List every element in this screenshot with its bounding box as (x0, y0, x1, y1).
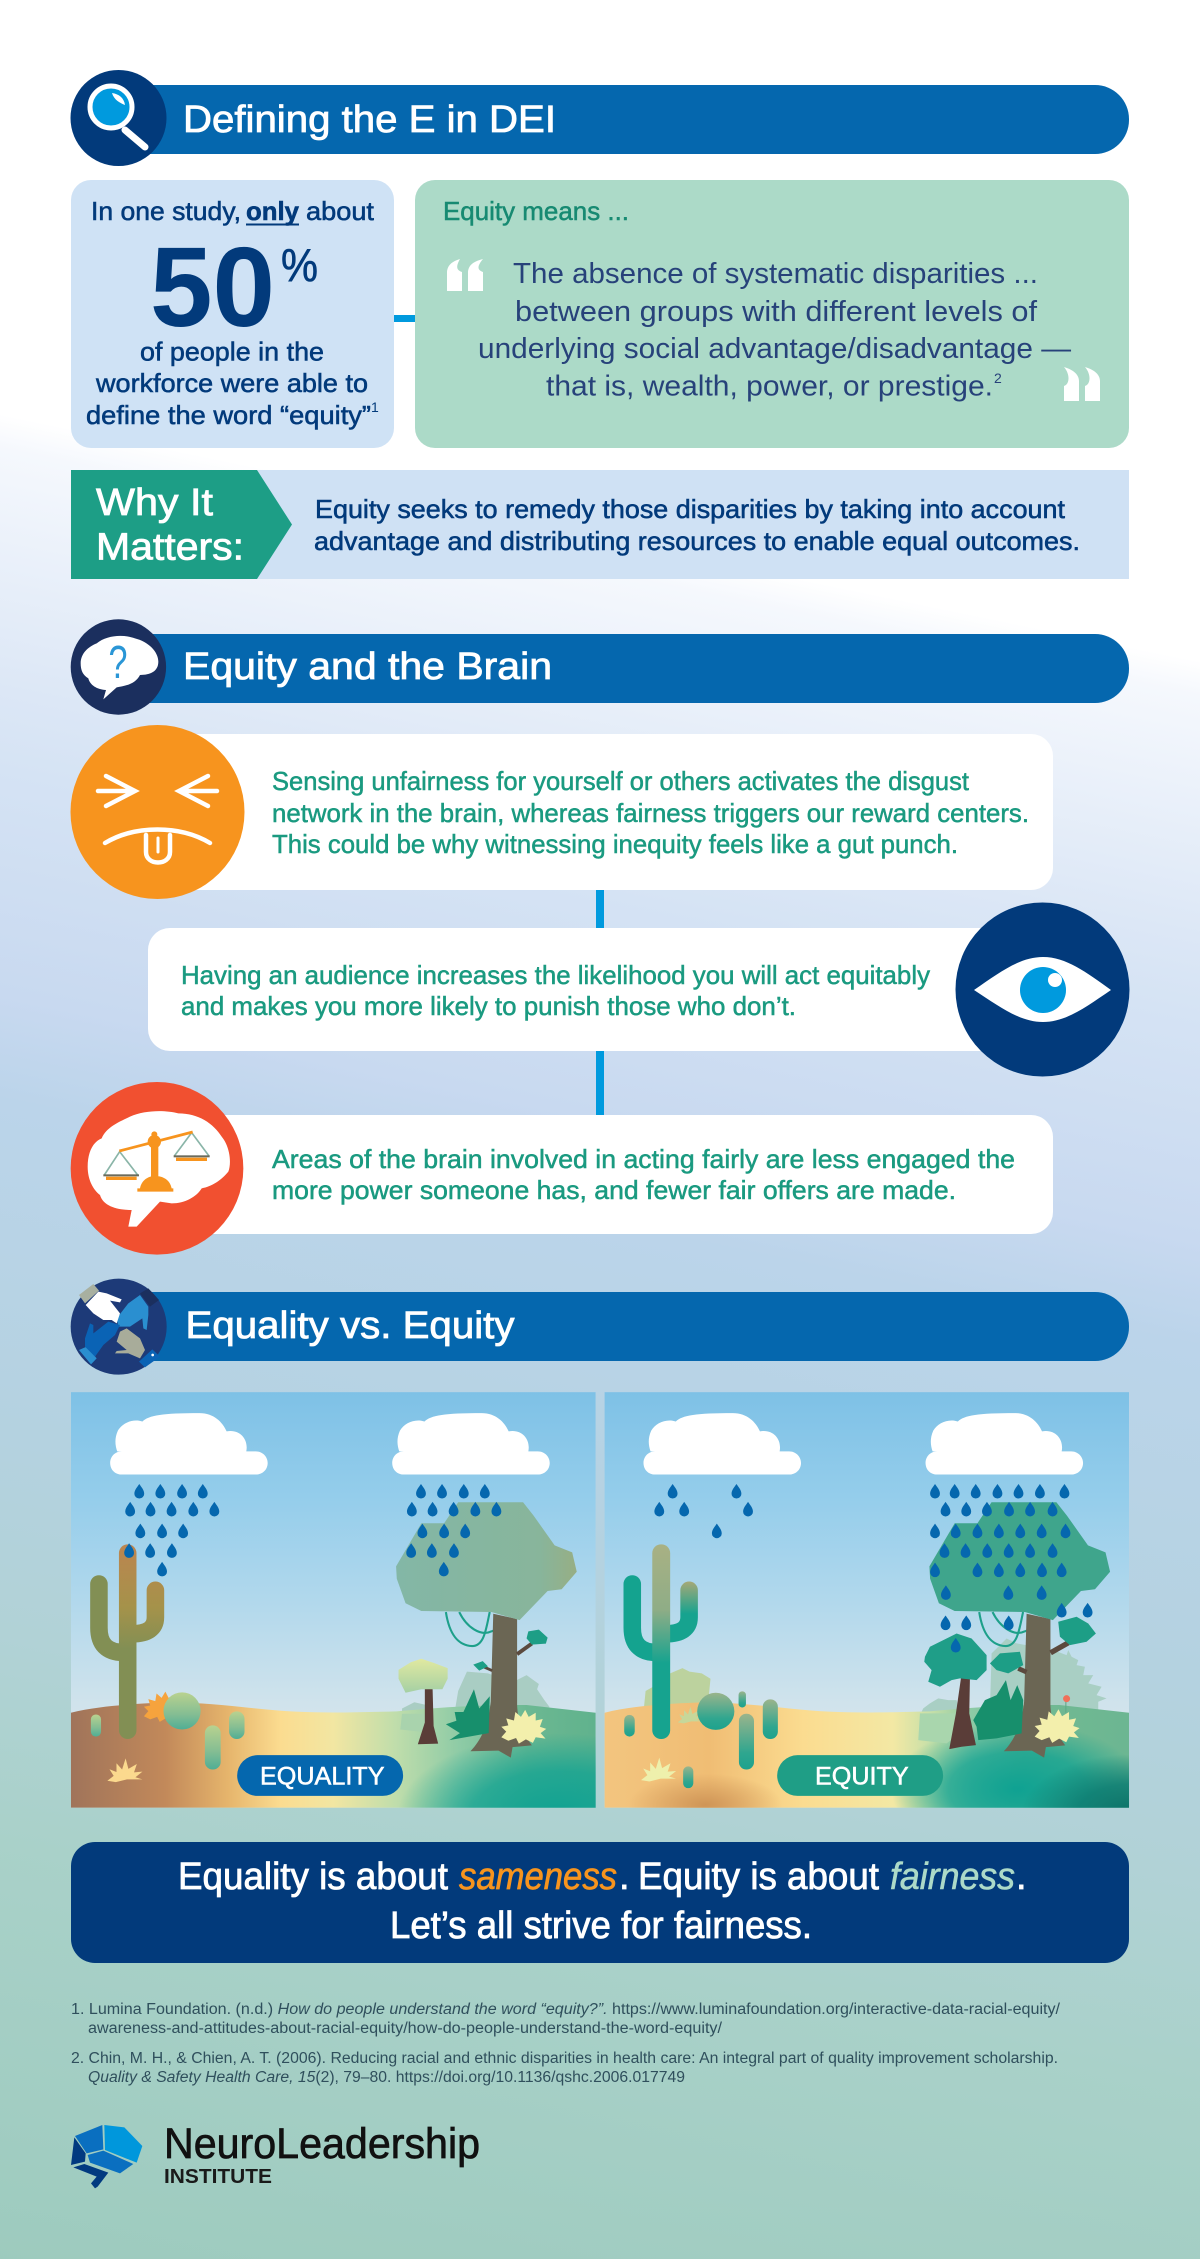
references: 1. Lumina Foundation. (n.d.) How do people understand the word “equity?”. https://www.luminafoundation.org/interactive-data-racial-equity/ (71, 2001, 1061, 2018)
card: power and fairness: Areas of the brain involved in acting fairly are less engaged the (272, 1144, 1015, 1174)
heading bar: Defining the E in DEI (100, 85, 1129, 154)
rain drops: left cloud (124, 1484, 219, 1576)
callout: sameness vs fairness: . (1016, 1856, 1027, 1898)
panel: equity means quote: The absence of systematic disparities ... (513, 258, 1038, 290)
icon: brain with scales (71, 1082, 243, 1255)
label pill: equity (777, 1755, 943, 1796)
heading bar: Equality vs. Equity: Equality vs. Equity (186, 1305, 514, 1347)
small tree (924, 1633, 987, 1749)
panel: equity means quote: 2 (994, 370, 1002, 386)
logo: NeuroLeadership Institute: NeuroLeadership (164, 2120, 480, 2168)
big tree (929, 1502, 1110, 1758)
references: Quality & Safety Health Care, 15(2), 79–80. https://doi.org/10.1136/qshc.2006.017749 (88, 2069, 685, 2086)
panel: 50 percent statistic: define the word “equity” (86, 400, 371, 430)
clouds (644, 1413, 1083, 1475)
connector lines (596, 888, 604, 1117)
label pill: equality: EQUALITY (260, 1764, 384, 1791)
card: disgust network: network in the brain, whereas fairness triggers our reward centers. (272, 798, 1029, 828)
banner: why it matters: Why It (96, 482, 213, 524)
callout: sameness vs fairness: sameness (459, 1856, 617, 1898)
ground (605, 1702, 1129, 1808)
icon: brain with question mark: ? (108, 636, 128, 688)
panel: 50 percent statistic: of people in the (140, 336, 324, 366)
banner: why it matters: advantage and distributing resources to enable equal outcomes. (314, 526, 1080, 556)
panel: equity scene (604, 1392, 1129, 1808)
callout: sameness vs fairness: Let’s all strive for fairness. (390, 1905, 812, 1947)
card: disgust network (150, 734, 1053, 890)
card: having an audience: and makes you more likely to punish those who don’t. (181, 991, 796, 1021)
callout: sameness vs fairness: . (619, 1856, 630, 1898)
callout: sameness vs fairness (71, 1842, 1129, 1963)
label pill: equity: EQUITY (815, 1764, 909, 1791)
logo: NeuroLeadership Institute (71, 2120, 480, 2188)
panel: equality scene (71, 1392, 596, 1808)
card: disgust network: This could be why witnessing inequity feels like a gut punch. (272, 829, 958, 859)
card: having an audience: Having an audience increases the likelihood you will act equitably (181, 960, 930, 990)
card: having an audience (148, 928, 1008, 1051)
icon: brain with question mark (71, 619, 166, 715)
connector between panels (394, 315, 415, 322)
small tree (399, 1659, 448, 1744)
ground shade: teal (895, 1729, 1126, 1808)
heading bar: Equity and the Brain (100, 634, 1129, 703)
banner: why it matters: Matters: (96, 526, 244, 568)
clouds (110, 1413, 550, 1475)
section: equality vs equity (70, 1278, 1129, 1808)
panel: equity means quote: that is, wealth, power, or prestige. (546, 370, 993, 402)
big tree (396, 1502, 577, 1758)
icon: opening quote mark (447, 259, 483, 291)
panel: equity means quote: underlying social advantage/disadvantage — (478, 333, 1071, 365)
callout: sameness vs fairness: Equity is about (638, 1856, 879, 1898)
rain drops: right cloud (406, 1484, 501, 1576)
barrel cactus and desert plants (624, 1691, 778, 1788)
panel: 50 percent statistic: 50 (150, 224, 275, 350)
sky (71, 1392, 596, 1808)
panel: 50 percent statistic: % (281, 239, 318, 291)
callout: sameness vs fairness: Equality is about (178, 1856, 448, 1898)
icon: disgusted face (70, 725, 244, 899)
panel: 50 percent statistic: workforce were able to (95, 368, 368, 398)
ground (71, 1702, 596, 1808)
pale bush over ground (918, 1713, 952, 1744)
rain drops: right cloud (930, 1484, 1093, 1653)
panel: equity means quote: Equity means ... (443, 196, 629, 226)
pale bush over ground (400, 1714, 414, 1730)
section: equity and the brain (70, 619, 1130, 1255)
icon: brain logo mark (71, 2125, 142, 2188)
flower (1063, 1695, 1070, 1713)
cactus (632, 1544, 689, 1739)
icon: magnifying glass (70, 70, 166, 166)
panel: 50 percent statistic: only (246, 196, 300, 226)
ground shade (403, 1738, 596, 1808)
heading bar: Equality vs. Equity (100, 1292, 1129, 1361)
references: awareness-and-attitudes-about-racial-equity/how-do-people-understand-the-word-equity/ (88, 2020, 723, 2037)
card: power and fairness (150, 1115, 1053, 1234)
sky (605, 1392, 1129, 1808)
references: 2. Chin, M. H., & Chien, A. T. (2006). Reducing racial and ethnic disparities in health care: An integral part of quality improvement scholarship. (71, 2050, 1058, 2067)
panel: equity means quote (415, 180, 1129, 448)
heading bar: Equity and the Brain: Equity and the Brain (183, 646, 552, 688)
rain drops: left cloud (654, 1484, 753, 1538)
barrel cactus and desert plants (91, 1692, 245, 1782)
ground shade: dark teal (1034, 1758, 1129, 1808)
logo: NeuroLeadership Institute: INSTITUTE (164, 2166, 272, 2188)
panel: equity means quote: between groups with different levels of (515, 296, 1038, 328)
icon: closing quote mark (1064, 367, 1100, 401)
section: defining the E in DEI (70, 70, 1129, 579)
icon: joined hands (71, 1279, 167, 1375)
callout: sameness vs fairness: fairness (890, 1856, 1015, 1898)
ground shade: ochre (640, 1780, 772, 1808)
pale bushes (402, 1672, 550, 1711)
card: power and fairness: more power someone has, and fewer fair offers are made. (272, 1175, 956, 1205)
panel: 50 percent statistic: In one study, (91, 196, 241, 226)
panel: 50 percent statistic: about (306, 196, 375, 226)
banner: why it matters (71, 470, 1129, 579)
banner: why it matters: Equity seeks to remedy those disparities by taking into account (315, 494, 1066, 524)
card: disgust network: Sensing unfairness for yourself or others activates the disgust (272, 766, 970, 796)
heading bar: Defining the E in DEI: Defining the E in DEI (183, 99, 556, 141)
label pill: equality (237, 1755, 403, 1796)
cactus (99, 1544, 155, 1739)
panel: 50 percent statistic (71, 180, 394, 448)
references (71, 2001, 1061, 2086)
panel: 50 percent statistic: 1 (371, 399, 379, 415)
icon: eye (956, 902, 1130, 1076)
pale bushes (644, 1638, 1107, 1715)
